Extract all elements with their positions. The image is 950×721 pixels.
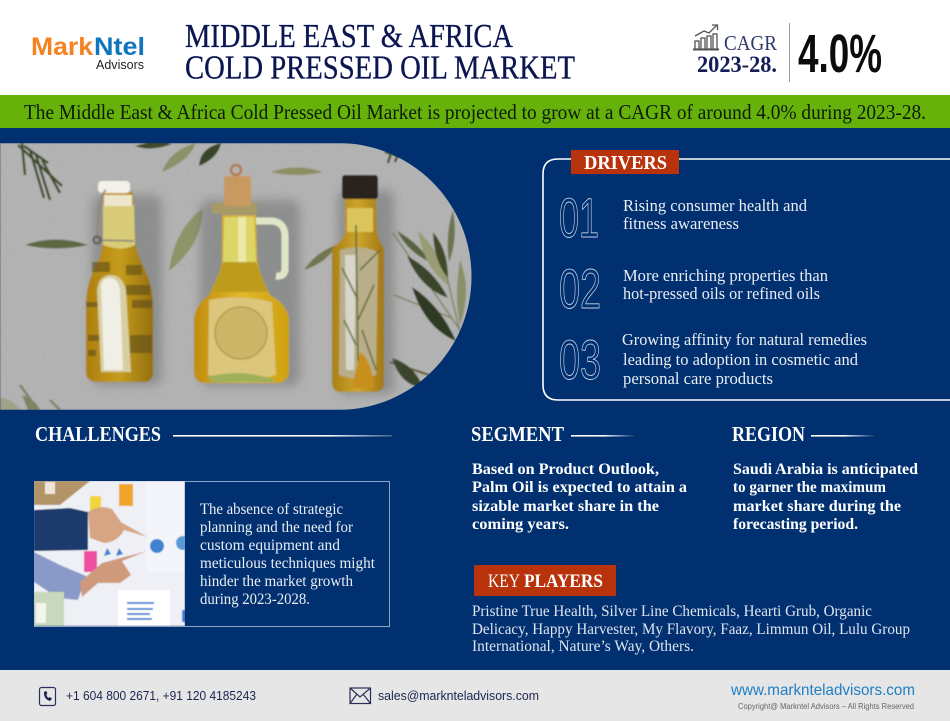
logo: MarkNtel Advisors: Ntel xyxy=(94,33,145,61)
copyright: Copyright@ Markntel Advisors – All Rights Reserved xyxy=(738,701,914,711)
title xyxy=(185,18,575,86)
driver 01 xyxy=(559,186,808,249)
challenges heading: CHALLENGES xyxy=(35,422,161,446)
phone numbers: +1 604 800 2671, +91 120 4185243 xyxy=(66,688,256,703)
panel: region xyxy=(732,422,918,533)
panel: key players xyxy=(472,565,910,655)
title: MIDDLE EAST & AFRICA xyxy=(185,18,513,55)
panel: challenges xyxy=(34,422,392,626)
region text: market share during the xyxy=(733,498,901,515)
email: sales@marknteladvisors.com xyxy=(378,688,539,703)
segment text: coming years. xyxy=(472,516,569,533)
region text: Saudi Arabia is anticipated xyxy=(733,461,918,478)
driver 03: 03 xyxy=(559,328,601,391)
driver 01: 01 xyxy=(559,186,599,249)
CAGR label: CAGR xyxy=(724,31,777,55)
logo: MarkNtel Advisors: Advisors xyxy=(96,57,144,72)
driver 01: fitness awareness xyxy=(623,214,739,233)
region text xyxy=(733,461,918,533)
website: www.marknteladvisors.com xyxy=(730,682,915,699)
challenges text: hinder the market growth xyxy=(200,573,353,590)
challenges text: meticulous techniques might xyxy=(200,555,376,572)
icon: envelope xyxy=(350,688,370,704)
driver 02: 02 xyxy=(559,257,601,320)
key players heading tag: KEY xyxy=(488,571,520,592)
segment text xyxy=(472,461,687,533)
region heading: REGION xyxy=(732,422,805,446)
key players heading tag: PLAYERS xyxy=(524,571,603,592)
driver 03: personal care products xyxy=(623,369,773,388)
icon: growth chart xyxy=(693,25,719,50)
challenges text: The absence of strategic xyxy=(200,501,343,518)
photo: cold pressed oil bottles xyxy=(0,142,480,410)
driver 03 xyxy=(559,328,867,391)
region text: to garner the maximum xyxy=(733,479,887,496)
segment text: Palm Oil is expected to attain a xyxy=(472,479,687,496)
key players list: Delicacy, Happy Harvester, My Flavory, Faaz, Limmun Oil, Lulu Group xyxy=(472,621,910,638)
drivers heading tag: DRIVERS xyxy=(584,152,667,174)
driver 03: Growing affinity for natural remedies xyxy=(622,330,867,349)
segment text: sizable market share in the xyxy=(472,498,659,515)
region text: forecasting period. xyxy=(733,516,858,533)
title: COLD PRESSED OIL MARKET xyxy=(185,50,575,86)
segment heading: SEGMENT xyxy=(471,422,564,446)
icon: phone xyxy=(40,688,56,706)
photo: pointing hands at charts xyxy=(34,481,190,626)
challenges text: custom equipment and xyxy=(200,537,340,554)
logo: MarkNtel Advisors xyxy=(31,33,145,72)
key players list xyxy=(472,603,910,655)
challenges text: during 2023-2028. xyxy=(200,591,310,608)
panel: drivers xyxy=(543,150,950,400)
panel: segment xyxy=(471,422,687,533)
logo: MarkNtel Advisors: Mark xyxy=(31,33,93,61)
CAGR label: 2023-28. xyxy=(697,52,777,77)
key players list: Pristine True Health, Silver Line Chemicals, Hearti Grub, Organic xyxy=(472,603,872,620)
driver 01: Rising consumer health and xyxy=(623,196,808,215)
segment text: Based on Product Outlook, xyxy=(472,461,659,478)
driver 02 xyxy=(559,257,828,320)
CAGR value: 4.0% xyxy=(798,24,882,84)
challenges text: planning and the need for xyxy=(200,519,354,536)
key players list: International, Nature’s Way, Others. xyxy=(472,638,694,655)
driver 03: leading to adoption in cosmetic and xyxy=(623,350,859,369)
driver 02: More enriching properties than xyxy=(623,266,828,285)
key players heading tag xyxy=(474,565,616,596)
challenges text xyxy=(200,501,376,608)
header band xyxy=(0,0,950,95)
driver 02: hot-pressed oils or refined oils xyxy=(623,284,820,303)
CAGR label xyxy=(697,31,777,77)
footer xyxy=(0,670,950,721)
